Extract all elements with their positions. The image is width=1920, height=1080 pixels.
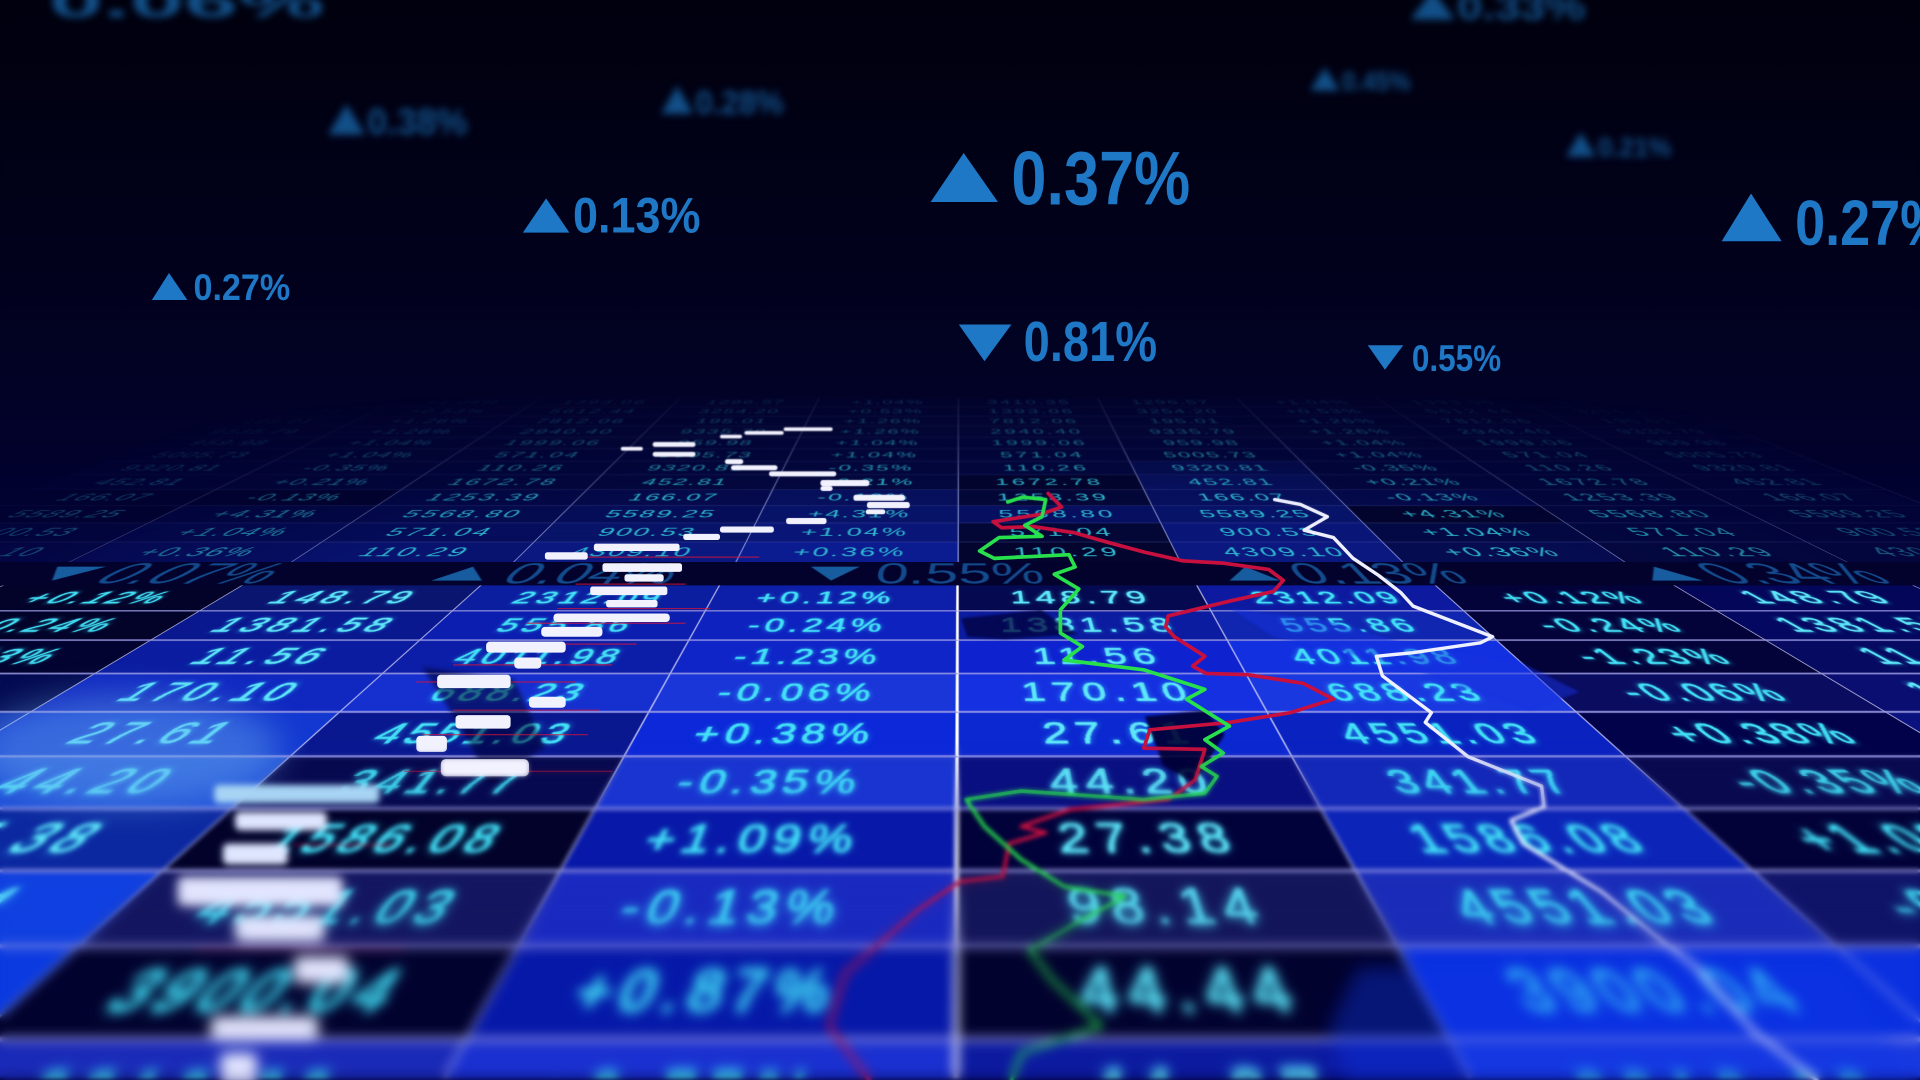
table row 9: 3900.04	[1490, 956, 1829, 1025]
panel: upper far data grid: 9335.79	[203, 428, 306, 435]
table row 5: 27.61	[53, 716, 253, 750]
panel: upper far data grid: +1.26%	[1293, 418, 1380, 425]
table row 2: -0.24%	[1527, 614, 1695, 636]
panel: upper far data grid: +1.04%	[168, 526, 297, 539]
panel: upper far data grid: 5568.80	[397, 508, 529, 520]
panel: upper far data grid: 5568.80	[1583, 508, 1721, 520]
table row 7: 1586.08	[250, 815, 519, 862]
panel: upper far data grid: 7812.06	[989, 418, 1080, 425]
panel: upper far data grid: -0.35%	[1347, 463, 1443, 472]
table row 1	[0, 585, 1920, 612]
panel: upper far data grid: +4.31%	[203, 508, 326, 520]
table row 1: 148.79	[1728, 587, 1908, 607]
panel: upper far data grid: 110.26	[1002, 463, 1090, 472]
panel: upper far data grid: +1.04%	[342, 439, 440, 447]
table row 8: 4551.03	[177, 879, 476, 935]
panel: upper far data grid: 5005.73	[656, 451, 755, 459]
panel: upper far data grid: 571.04	[1497, 451, 1597, 459]
panel: upper far data grid: 959.98	[1161, 439, 1243, 447]
panel: upper far data grid: +0.53%	[1282, 408, 1366, 414]
panel: upper far data grid: 3254.20	[1568, 408, 1664, 414]
panel: upper far data grid: 571.04	[379, 526, 500, 539]
panel: upper far data grid: 9320.81	[644, 463, 747, 472]
panel: upper far data grid: 5005.73	[145, 451, 258, 459]
panel: upper far data grid: 3410.35	[276, 399, 368, 405]
panel: upper far data grid: +1.04%	[1272, 399, 1353, 405]
panel: upper far data grid: 3254.20	[253, 408, 348, 414]
table row 4: 688.23	[1319, 678, 1495, 706]
panel: upper far data grid: 1393.06	[1407, 399, 1501, 405]
panel: upper far data grid: 166.07	[48, 492, 162, 503]
table row 1: +0.12%	[10, 588, 186, 607]
blurred distant tickers: 0.28%	[696, 85, 784, 122]
table row 2	[0, 611, 1920, 642]
depth of field: near blur	[0, 744, 1920, 1080]
panel: upper far data grid: 452.81	[1723, 477, 1831, 487]
table row 9: 3900.04	[86, 956, 425, 1025]
panel: upper far data grid: +4.31%	[1395, 508, 1512, 520]
panel: upper far data grid: 452.81	[86, 477, 194, 487]
ticker: up 0.13%	[523, 188, 700, 244]
panel: upper far data grid: 1296.57	[1549, 399, 1641, 405]
table row 3: -1.23%	[729, 644, 884, 669]
depth of field: far blur	[14, 398, 1919, 532]
panel: upper far data grid: 5589.25	[0, 508, 135, 520]
ticker: up 0.27% left: 0.27%	[193, 267, 290, 308]
table row 2: 1381.58	[200, 614, 408, 636]
table row 2: 555.86	[489, 614, 642, 636]
panel: upper far data grid: 1672.78	[1533, 477, 1658, 487]
panel: upper far data grid: +1.26%	[843, 418, 922, 425]
panel: upper far data grid: 571.04	[1009, 526, 1116, 539]
panel: upper far data grid: 1393.06	[988, 408, 1076, 414]
table row 1: +0.12%	[1491, 588, 1655, 607]
table row 2: 555.86	[1275, 614, 1427, 636]
table row 10	[0, 1034, 1920, 1080]
table row 1: 2312.09	[506, 588, 671, 607]
panel: upper far data grid: +1.04%	[829, 451, 918, 459]
panel: upper far data grid: 9320.81	[113, 463, 230, 472]
panel: upper far data grid: +1.04%	[421, 399, 505, 405]
blurred distant tickers	[49, 0, 1671, 163]
panel: upper far data grid: 1253.39	[996, 492, 1111, 503]
blurred distant tickers: 0.38%	[367, 102, 468, 143]
panel: upper far data grid: 166.07	[1755, 492, 1868, 503]
ticker: up 0.37%: 0.37%	[1011, 136, 1190, 221]
panel: upper far data grid: 5589.25	[1197, 508, 1315, 520]
panel: upper far data grid: 5612.44	[546, 408, 640, 414]
panel: upper far data grid: 5612.44	[1421, 408, 1519, 414]
panel: upper far data grid: +0.36%	[1437, 545, 1567, 559]
panel: upper far data grid: +0.36%	[128, 545, 266, 559]
table row 2: 1381.58	[999, 614, 1182, 636]
panel: upper far data grid: 2940.40	[1453, 428, 1559, 435]
panel: upper far data grid: 9335.79	[677, 428, 769, 435]
table row 5: 27.61	[1040, 716, 1201, 750]
table row 6: 341.77	[1377, 762, 1588, 801]
table row 9	[0, 940, 1920, 1050]
panel: upper far data grid: 2940.40	[990, 428, 1084, 435]
panel: upper far data grid: 1393.06	[559, 399, 650, 405]
panel: upper far data grid: 1672.78	[995, 477, 1105, 487]
panel: upper far data grid: 166.07	[625, 492, 722, 503]
table row 4: 170.10	[1020, 677, 1199, 707]
panel: upper far data grid: +1.26%	[838, 428, 921, 435]
table row 7	[0, 806, 1920, 877]
panel: upper far data grid: 1296.57	[704, 399, 787, 405]
panel: upper far data grid: +1.26%	[384, 418, 475, 425]
blurred distant tickers: 0.21%	[1598, 133, 1671, 163]
panel: upper far data grid: 1672.78	[443, 477, 563, 487]
panel: upper far data grid: +0.53%	[846, 408, 923, 414]
table row 3: -1.23%	[1564, 644, 1746, 669]
panel: upper far data grid: -0.13%	[816, 492, 910, 503]
panel: upper far data grid: +1.04%	[319, 451, 420, 459]
ticker: down 0.81%	[959, 310, 1157, 373]
panel: upper far data grid: +0.21%	[1360, 477, 1467, 487]
panel: upper far data grid: 1999.06	[991, 439, 1089, 447]
table row 9: 44.44	[1075, 954, 1314, 1026]
table row 5: +0.38%	[688, 717, 878, 750]
panel: upper far data grid: 959.98	[182, 439, 276, 447]
table row 4: -0.06%	[713, 678, 878, 706]
panel: upper far data grid: 110.26	[1519, 463, 1621, 472]
panel: upper far data grid: 110.29	[1012, 545, 1123, 559]
panel: upper far data grid: 195.01	[1147, 418, 1223, 425]
ticker: down 0.55%: 0.55%	[1412, 338, 1501, 379]
panel: upper far data grid: 110.29	[352, 545, 477, 559]
panel: upper far data grid	[0, 398, 1920, 562]
panel: upper far data grid: 3254.20	[1135, 408, 1221, 414]
panel: upper far data grid: +1.04%	[1415, 526, 1538, 539]
panel: upper far data grid: 900.53	[593, 526, 700, 539]
panel: upper far data grid: -0.13%	[1380, 492, 1485, 503]
panel: upper far data grid: 7812.06	[531, 418, 629, 425]
panel: upper far data grid: +4.31%	[806, 508, 911, 520]
panel: upper far data grid: 5568.80	[998, 508, 1118, 520]
ticker: up 0.37%	[931, 136, 1190, 221]
panel: upper far data grid: 1253.39	[1557, 492, 1688, 503]
table row 6: 44.20	[1047, 761, 1222, 802]
ticker: down 0.81%: 0.81%	[1024, 310, 1157, 373]
panel: upper far data grid: 1999.06	[500, 439, 606, 447]
table row 4: -0.06%	[1607, 678, 1804, 706]
panel: upper far data grid: 9335.79	[1611, 428, 1714, 435]
panel: upper far data grid: 110.26	[472, 463, 570, 472]
panel: upper far data grid: -0.35%	[296, 463, 397, 472]
ticker band	[0, 562, 1920, 585]
blurred distant tickers: 0.45%	[1342, 67, 1411, 97]
table row 5: 4551.03	[363, 717, 585, 750]
table row 8	[0, 868, 1920, 957]
table row 4	[0, 674, 1920, 714]
panel: upper far data grid: 195.01	[1595, 418, 1681, 425]
panel: upper far data grid: 110.29	[1653, 545, 1785, 559]
panel: upper far data grid: 1296.57	[1129, 399, 1212, 405]
table row 1: +0.12%	[753, 588, 896, 607]
table row 8: 98.14	[1064, 878, 1277, 936]
table row 8: 4551.03	[1439, 879, 1738, 935]
panel: upper far data grid: 452.81	[1185, 477, 1278, 487]
panel: upper far data grid: 4309.10	[1219, 545, 1350, 559]
panel: upper far data grid: 3254.20	[696, 408, 782, 414]
ticker: down 0.55%	[1368, 338, 1501, 379]
panel: upper far data grid: 571.04	[1621, 526, 1747, 539]
panel: lower near data grid	[0, 562, 1920, 1080]
panel: upper far data grid: +1.04%	[850, 399, 925, 405]
panel: upper far data grid: 900.53	[1216, 526, 1323, 539]
panel: upper far data grid: 5589.25	[1782, 508, 1918, 520]
panel: upper far data grid: -0.13%	[239, 492, 350, 503]
panel: upper far data grid: +0.36%	[791, 545, 907, 559]
ticker: up 0.27% left	[152, 267, 290, 308]
table row 5: 4551.03	[1331, 717, 1553, 750]
table row 3	[0, 640, 1920, 675]
table row 3: 11.56	[1031, 643, 1167, 669]
panel: upper far data grid: +1.04%	[799, 526, 909, 539]
panel: upper far data grid: +0.21%	[266, 477, 377, 487]
table row 8: -0.13%	[610, 879, 847, 935]
panel: upper far data grid: 571.04	[1000, 451, 1086, 459]
panel: upper far data grid: 9320.81	[1686, 463, 1804, 472]
panel: upper far data grid: 9320.81	[1169, 463, 1273, 472]
panel: upper far data grid: 5005.73	[1659, 451, 1771, 459]
panel: upper far data grid: +1.04%	[1330, 451, 1428, 459]
table row 9: +0.87%	[562, 956, 843, 1025]
ticker: up 0.13%: 0.13%	[573, 188, 700, 244]
panel: upper far data grid: +1.26%	[1304, 428, 1395, 435]
table row 2: -0.24%	[744, 614, 888, 636]
panel: upper far data grid: 959.98	[674, 439, 756, 447]
table row 5	[0, 712, 1920, 760]
panel: upper far data grid: 571.04	[490, 451, 585, 459]
table row 3: 11.56	[179, 643, 343, 669]
panel: upper far data grid: 7812.06	[1437, 418, 1538, 425]
panel: upper far data grid: 2940.40	[516, 428, 618, 435]
panel: upper far data grid: +0.53%	[403, 408, 490, 414]
table row 6	[0, 756, 1920, 814]
table row 5: +0.38%	[1650, 717, 1876, 750]
panel: upper far data grid: 4309.10	[566, 545, 697, 559]
panel: upper far data grid: +1.26%	[364, 428, 458, 435]
panel: upper far data grid: 195.01	[693, 418, 769, 425]
panel: upper far data grid: 1253.39	[421, 492, 547, 503]
panel: upper far data grid: 195.01	[235, 418, 322, 425]
panel: upper far data grid: +1.04%	[834, 439, 920, 447]
table row 7: 1586.08	[1397, 815, 1665, 862]
panel: upper far data grid: 5589.25	[601, 508, 720, 520]
table row 4: 688.23	[421, 678, 597, 706]
panel: upper far data grid: -0.35%	[827, 463, 914, 472]
panel: upper far data grid: +0.21%	[818, 477, 915, 487]
table row 7: +1.09%	[636, 815, 863, 862]
ticker: up 0.27% right	[1722, 188, 1920, 259]
panel: upper far data grid: 1999.06	[1471, 439, 1581, 447]
table row 1: 148.79	[259, 587, 428, 607]
table row 1: 148.79	[1009, 587, 1156, 607]
panel: upper far data grid: 166.07	[1195, 492, 1292, 503]
panel: upper far data grid: +1.04%	[1317, 439, 1411, 447]
table row 3: 4011.98	[446, 644, 632, 669]
panel: upper far data grid: 452.81	[639, 477, 731, 487]
panel: upper far data grid: 3410.35	[987, 399, 1072, 405]
depth of field: nearest blur	[0, 871, 1920, 1080]
table row 7: 27.38	[1054, 814, 1247, 862]
table row 1: 2312.09	[1245, 588, 1410, 607]
table row 4: 170.10	[104, 677, 317, 707]
panel: upper far data grid: 5005.73	[1161, 451, 1261, 459]
table row 3: 4011.98	[1284, 644, 1470, 669]
table row 6: -0.35%	[670, 762, 865, 801]
panel: upper far data grid: 9335.79	[1147, 428, 1239, 435]
table row 6: 341.77	[328, 762, 539, 801]
panel: upper far data grid: 959.98	[1641, 439, 1735, 447]
